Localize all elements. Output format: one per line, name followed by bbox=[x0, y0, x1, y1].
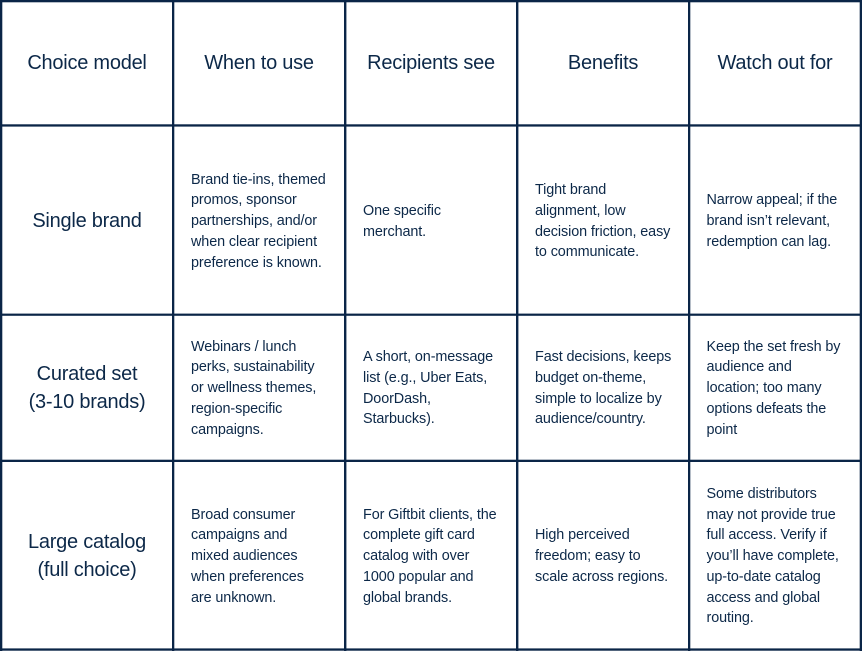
row label: Curated set bbox=[29, 363, 145, 413]
Curated set: when to use: perks, sustainability bbox=[191, 359, 314, 375]
heading: When to use: When to use bbox=[204, 52, 314, 74]
Curated set: watch out for: point bbox=[706, 422, 737, 438]
Large catalog: benefits: High perceived bbox=[535, 527, 630, 543]
Single brand: benefits: decision friction, easy bbox=[535, 224, 670, 240]
Large catalog: recipients see: catalog with over bbox=[363, 548, 469, 564]
heading: Recipients see: Recipients see bbox=[367, 52, 495, 74]
Curated set: benefits: simple to localize by bbox=[535, 390, 662, 406]
Curated set: watch out for: Keep the set fresh by bbox=[706, 338, 840, 354]
Single brand: when to use: promos, sponsor bbox=[191, 192, 297, 208]
Curated set: watch out for bbox=[706, 338, 840, 438]
row label: Single brand: Single brand bbox=[32, 210, 142, 232]
Single brand: benefits: to communicate. bbox=[535, 244, 639, 260]
Single brand: recipients see: merchant. bbox=[363, 224, 426, 240]
row label: Large catalog: (full choice) bbox=[37, 558, 136, 580]
heading: Watch out for: Watch out for bbox=[718, 52, 832, 74]
Large catalog: when to use: are unknown. bbox=[191, 590, 276, 606]
Curated set: watch out for: audience and bbox=[706, 359, 792, 375]
Large catalog: benefits: scale across regions. bbox=[535, 569, 668, 585]
row label: Large catalog bbox=[28, 530, 146, 580]
Large catalog: when to use bbox=[191, 506, 304, 606]
Large catalog: recipients see bbox=[363, 506, 497, 606]
Curated set: benefits: audience/country. bbox=[535, 411, 646, 427]
Large catalog: when to use: mixed audiences bbox=[191, 548, 298, 564]
Curated set: benefits: Fast decisions, keeps bbox=[535, 349, 671, 365]
row label: Curated set: Curated set bbox=[37, 363, 137, 385]
Large catalog: when to use: Broad consumer bbox=[191, 506, 295, 522]
Single brand: recipients see bbox=[363, 203, 441, 240]
Single brand: when to use: partnerships, and/or bbox=[191, 213, 317, 229]
Single brand: watch out for: brand isn’t relevant, bbox=[706, 213, 830, 229]
Curated set: recipients see: Starbucks). bbox=[363, 411, 435, 427]
Large catalog: watch out for: routing. bbox=[706, 610, 754, 626]
Large catalog: watch out for: may not provide true bbox=[706, 506, 836, 522]
Curated set: when to use: or wellness themes, bbox=[191, 380, 316, 396]
heading: Choice model: Choice model bbox=[27, 52, 147, 74]
Single brand: watch out for: redemption can lag. bbox=[706, 234, 831, 250]
Large catalog: watch out for bbox=[706, 486, 839, 626]
Single brand: watch out for: Narrow appeal; if the bbox=[706, 192, 837, 208]
Single brand: benefits bbox=[535, 182, 670, 260]
Large catalog: recipients see: global brands. bbox=[363, 590, 452, 606]
Single brand: when to use: preference is known. bbox=[191, 255, 322, 271]
Large catalog: watch out for: full access. Verify if bbox=[706, 527, 827, 543]
row label: Large catalog: Large catalog bbox=[28, 530, 146, 552]
Large catalog: benefits: freedom; easy to bbox=[535, 548, 641, 564]
Single brand: benefits: alignment, low bbox=[535, 203, 626, 219]
Single brand: watch out for bbox=[706, 192, 837, 250]
Large catalog: when to use: when preferences bbox=[191, 569, 304, 585]
row label: Curated set: (3-10 brands) bbox=[29, 391, 145, 413]
Curated set: watch out for: options defeats the bbox=[706, 401, 826, 417]
Curated set: watch out for: location; too many bbox=[706, 380, 822, 396]
Single brand: when to use: Brand tie-ins, themed bbox=[191, 172, 326, 188]
Curated set: recipients see: list (e.g., Uber Eats, bbox=[363, 370, 487, 386]
Single brand: recipients see: One specific bbox=[363, 203, 441, 219]
Large catalog: recipients see: For Giftbit clients, the bbox=[363, 506, 497, 522]
Large catalog: recipients see: 1000 popular and bbox=[363, 569, 473, 585]
Single brand: benefits: Tight brand bbox=[535, 182, 606, 198]
Large catalog: when to use: campaigns and bbox=[191, 527, 287, 543]
Curated set: when to use: Webinars / lunch bbox=[191, 338, 296, 354]
Curated set: when to use: campaigns. bbox=[191, 422, 264, 438]
Curated set: recipients see: DoorDash, bbox=[363, 390, 431, 406]
Large catalog: watch out for: access and global bbox=[706, 590, 820, 606]
Single brand: when to use bbox=[191, 172, 326, 271]
Single brand: when to use: when clear recipient bbox=[191, 234, 317, 250]
Curated set: when to use bbox=[191, 338, 316, 438]
Curated set: when to use: region-specific bbox=[191, 401, 282, 417]
Curated set: benefits: budget on-theme, bbox=[535, 370, 646, 386]
Large catalog: watch out for: Some distributors bbox=[706, 486, 817, 502]
Large catalog: recipients see: complete gift card bbox=[363, 527, 475, 543]
Curated set: benefits bbox=[535, 349, 671, 427]
heading: Benefits: Benefits bbox=[568, 52, 638, 74]
Large catalog: watch out for: up-to-date catalog bbox=[706, 569, 821, 585]
Curated set: recipients see bbox=[363, 349, 493, 427]
Large catalog: watch out for: you’ll have complete, bbox=[706, 548, 839, 564]
Large catalog: benefits bbox=[535, 527, 668, 585]
Curated set: recipients see: A short, on-message bbox=[363, 349, 493, 365]
